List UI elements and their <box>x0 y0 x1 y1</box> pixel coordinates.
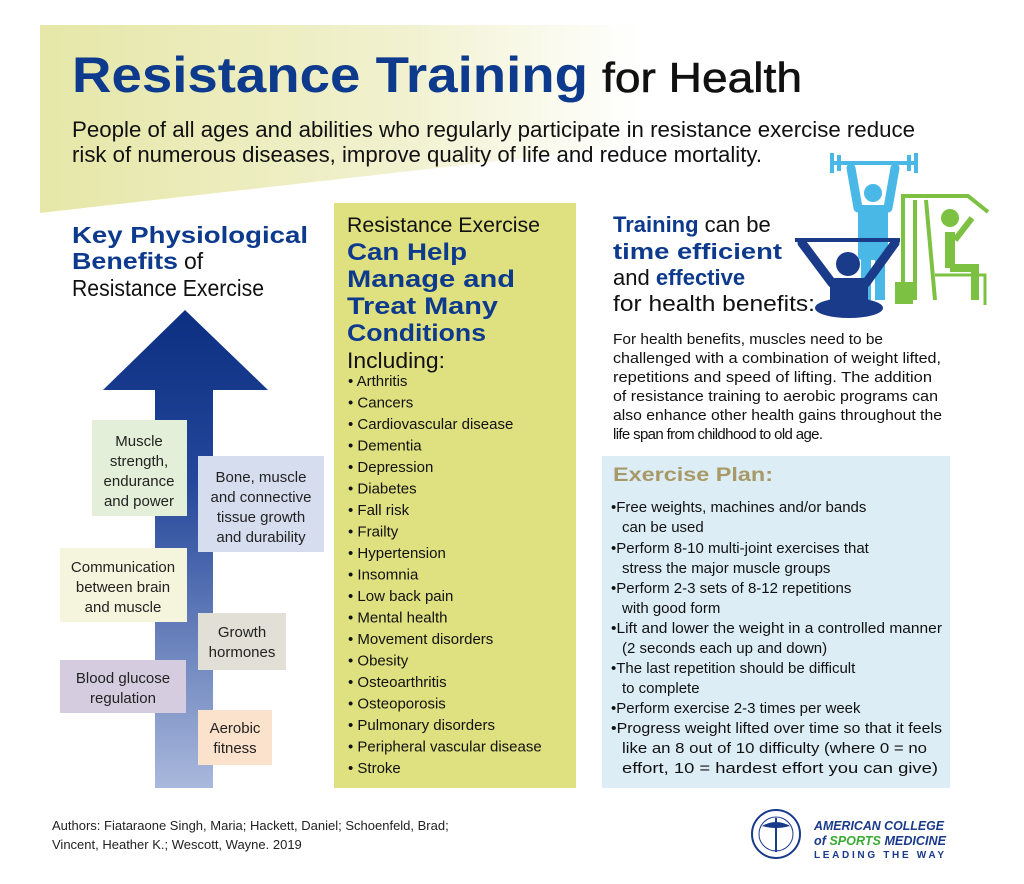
box: muscle strength: strength, <box>110 453 168 470</box>
box: communication <box>60 548 187 622</box>
logo: ACSM: of SPORTS MEDICINE <box>814 833 946 848</box>
exercise plan bullets: •Perform 8-10 multi-joint exercises that <box>611 540 870 557</box>
exercise plan bullets: with good form <box>621 600 720 617</box>
paragraph: health benefits: For health benefits, muscles need to be <box>613 331 883 348</box>
conditions heading <box>347 214 540 373</box>
conditions list: • Movement disorders <box>348 631 493 648</box>
heading: training time efficient: time efficient <box>613 239 783 264</box>
exercise plan bullets: •Lift and lower the weight in a controlled manner <box>611 620 942 637</box>
box: communication: Communication <box>71 559 175 576</box>
box: blood glucose: regulation <box>90 690 156 707</box>
heading: key physiological benefits: Benefits <box>72 248 178 274</box>
box: bone muscle: Bone, muscle <box>216 469 306 486</box>
panel: exercise plan <box>602 456 950 788</box>
icon: green machine user <box>897 196 988 305</box>
subtitle <box>72 117 915 167</box>
box: muscle strength <box>92 420 187 516</box>
box: growth hormones: hormones <box>209 644 275 661</box>
icon: cyan weightlifter <box>830 153 918 300</box>
exercise plan bullets: •Free weights, machines and/or bands <box>611 499 866 516</box>
conditions list: • Insomnia <box>348 566 419 584</box>
panel: conditions <box>334 203 576 788</box>
benefit boxes <box>60 420 324 765</box>
title <box>72 47 802 103</box>
conditions list: • Diabetes <box>348 480 417 498</box>
box: muscle strength: endurance <box>104 473 174 490</box>
banner background <box>40 25 640 213</box>
footer: authors: Authors: Fiataraone Singh, Maria; Hackett, Daniel; Schoenfeld, Brad; <box>52 818 449 833</box>
conditions list: • Obesity <box>348 652 409 670</box>
paragraph: health benefits: challenged with a combination of weight lifted, <box>613 350 941 367</box>
conditions list: • Osteoporosis <box>348 696 446 712</box>
heading: key physiological benefits: Resistance Exercise <box>72 275 264 301</box>
conditions list: • Pulmonary disorders <box>348 717 495 734</box>
exercise plan bullets: to complete <box>622 680 700 697</box>
logo: ACSM: LEADING THE WAY <box>814 850 944 861</box>
box: bone muscle: and connective <box>211 489 311 506</box>
conditions list: • Depression <box>348 459 433 476</box>
conditions heading: Resistance Exercise <box>347 214 540 237</box>
exercise plan heading: Exercise Plan: <box>613 465 773 486</box>
subtitle: risk of numerous diseases, improve quality of life and reduce mortality. <box>72 142 762 167</box>
title: for Health <box>602 54 802 101</box>
box: growth hormones: Growth <box>218 624 266 641</box>
conditions list: • Stroke <box>348 760 401 777</box>
box: muscle strength: Muscle <box>115 433 163 450</box>
exercise plan bullets: •Perform 2-3 sets of 8-12 repetitions <box>611 580 851 597</box>
box: bone muscle <box>198 456 324 552</box>
logo: ACSM <box>752 810 946 861</box>
box: blood glucose: Blood glucose <box>76 670 170 687</box>
exercise plan bullets: (2 seconds each up and down) <box>622 640 827 657</box>
exercise plan bullets: effort, 10 = hardest effort you can give) <box>622 760 938 777</box>
icon: navy seated band exercise <box>795 240 900 318</box>
exercise plan bullets: •Perform exercise 2-3 times per week <box>611 700 861 717</box>
paragraph: health benefits: repetitions and speed of lifting. The addition <box>613 369 932 386</box>
heading: key physiological benefits: of <box>184 248 204 274</box>
exercise plan bullets: like an 8 out of 10 difficulty (where 0 = no <box>622 740 927 757</box>
conditions list: • Dementia <box>348 438 422 454</box>
footer: authors: Vincent, Heather K.; Wescott, Wayne. 2019 <box>52 837 302 852</box>
arrow <box>103 310 268 788</box>
box: growth hormones <box>198 613 286 670</box>
box: communication: between brain <box>76 579 170 596</box>
conditions list: • Cancers <box>348 394 413 412</box>
exercise plan bullets: •Progress weight lifted over time so that it feels <box>611 720 942 737</box>
conditions list: • Cardiovascular disease <box>348 416 513 433</box>
paragraph: health benefits: of resistance training to aerobic programs can <box>613 388 938 405</box>
paragraph: health benefits <box>613 331 942 443</box>
box: blood glucose <box>60 660 186 713</box>
conditions list <box>348 373 542 777</box>
box: aerobic fitness: Aerobic <box>210 720 261 737</box>
conditions list: • Hypertension <box>348 545 446 562</box>
conditions heading: Including: <box>347 348 445 373</box>
box: muscle strength: and power <box>104 493 174 510</box>
exercise plan bullets <box>611 499 942 777</box>
exercise plan bullets: stress the major muscle groups <box>622 560 830 577</box>
box: communication: and muscle <box>85 599 161 616</box>
heading: training time efficient: Training can be <box>613 212 771 237</box>
conditions heading: Conditions <box>347 320 486 347</box>
logo: ACSM: AMERICAN COLLEGE <box>813 818 944 833</box>
box: bone muscle: tissue growth <box>217 509 305 526</box>
heading: training time efficient: for health benefits: <box>613 291 815 316</box>
heading: training time efficient <box>613 212 815 316</box>
conditions heading: Can Help <box>347 239 467 266</box>
conditions heading: Treat Many <box>347 293 499 320</box>
box: aerobic fitness: fitness <box>213 740 257 757</box>
conditions heading: Manage and <box>347 266 515 293</box>
title: Resistance Training <box>72 47 588 103</box>
conditions list: • Fall risk <box>348 502 410 519</box>
conditions list: • Frailty <box>348 524 399 540</box>
footer: authors <box>52 818 449 852</box>
heading: training time efficient: and effective <box>613 265 745 290</box>
conditions list: • Mental health <box>348 610 447 626</box>
icon: athletes <box>795 153 988 318</box>
heading: key physiological benefits: Key Physiological <box>72 222 308 248</box>
conditions list: • Low back pain <box>348 588 453 605</box>
subtitle: People of all ages and abilities who regularly participate in resistance exercise reduce <box>72 117 915 142</box>
paragraph: health benefits: life span from childhood to old age. <box>613 426 823 443</box>
heading: key physiological benefits <box>72 222 308 301</box>
exercise plan bullets: can be used <box>622 519 704 536</box>
conditions list: • Osteoarthritis <box>348 674 447 691</box>
conditions list: • Peripheral vascular disease <box>348 738 542 756</box>
box: aerobic fitness <box>198 710 272 765</box>
exercise plan bullets: •The last repetition should be difficult <box>611 660 856 677</box>
conditions list: • Arthritis <box>348 373 407 390</box>
paragraph: health benefits: also enhance other health gains throughout the <box>613 407 942 424</box>
box: bone muscle: and durability <box>216 529 306 546</box>
